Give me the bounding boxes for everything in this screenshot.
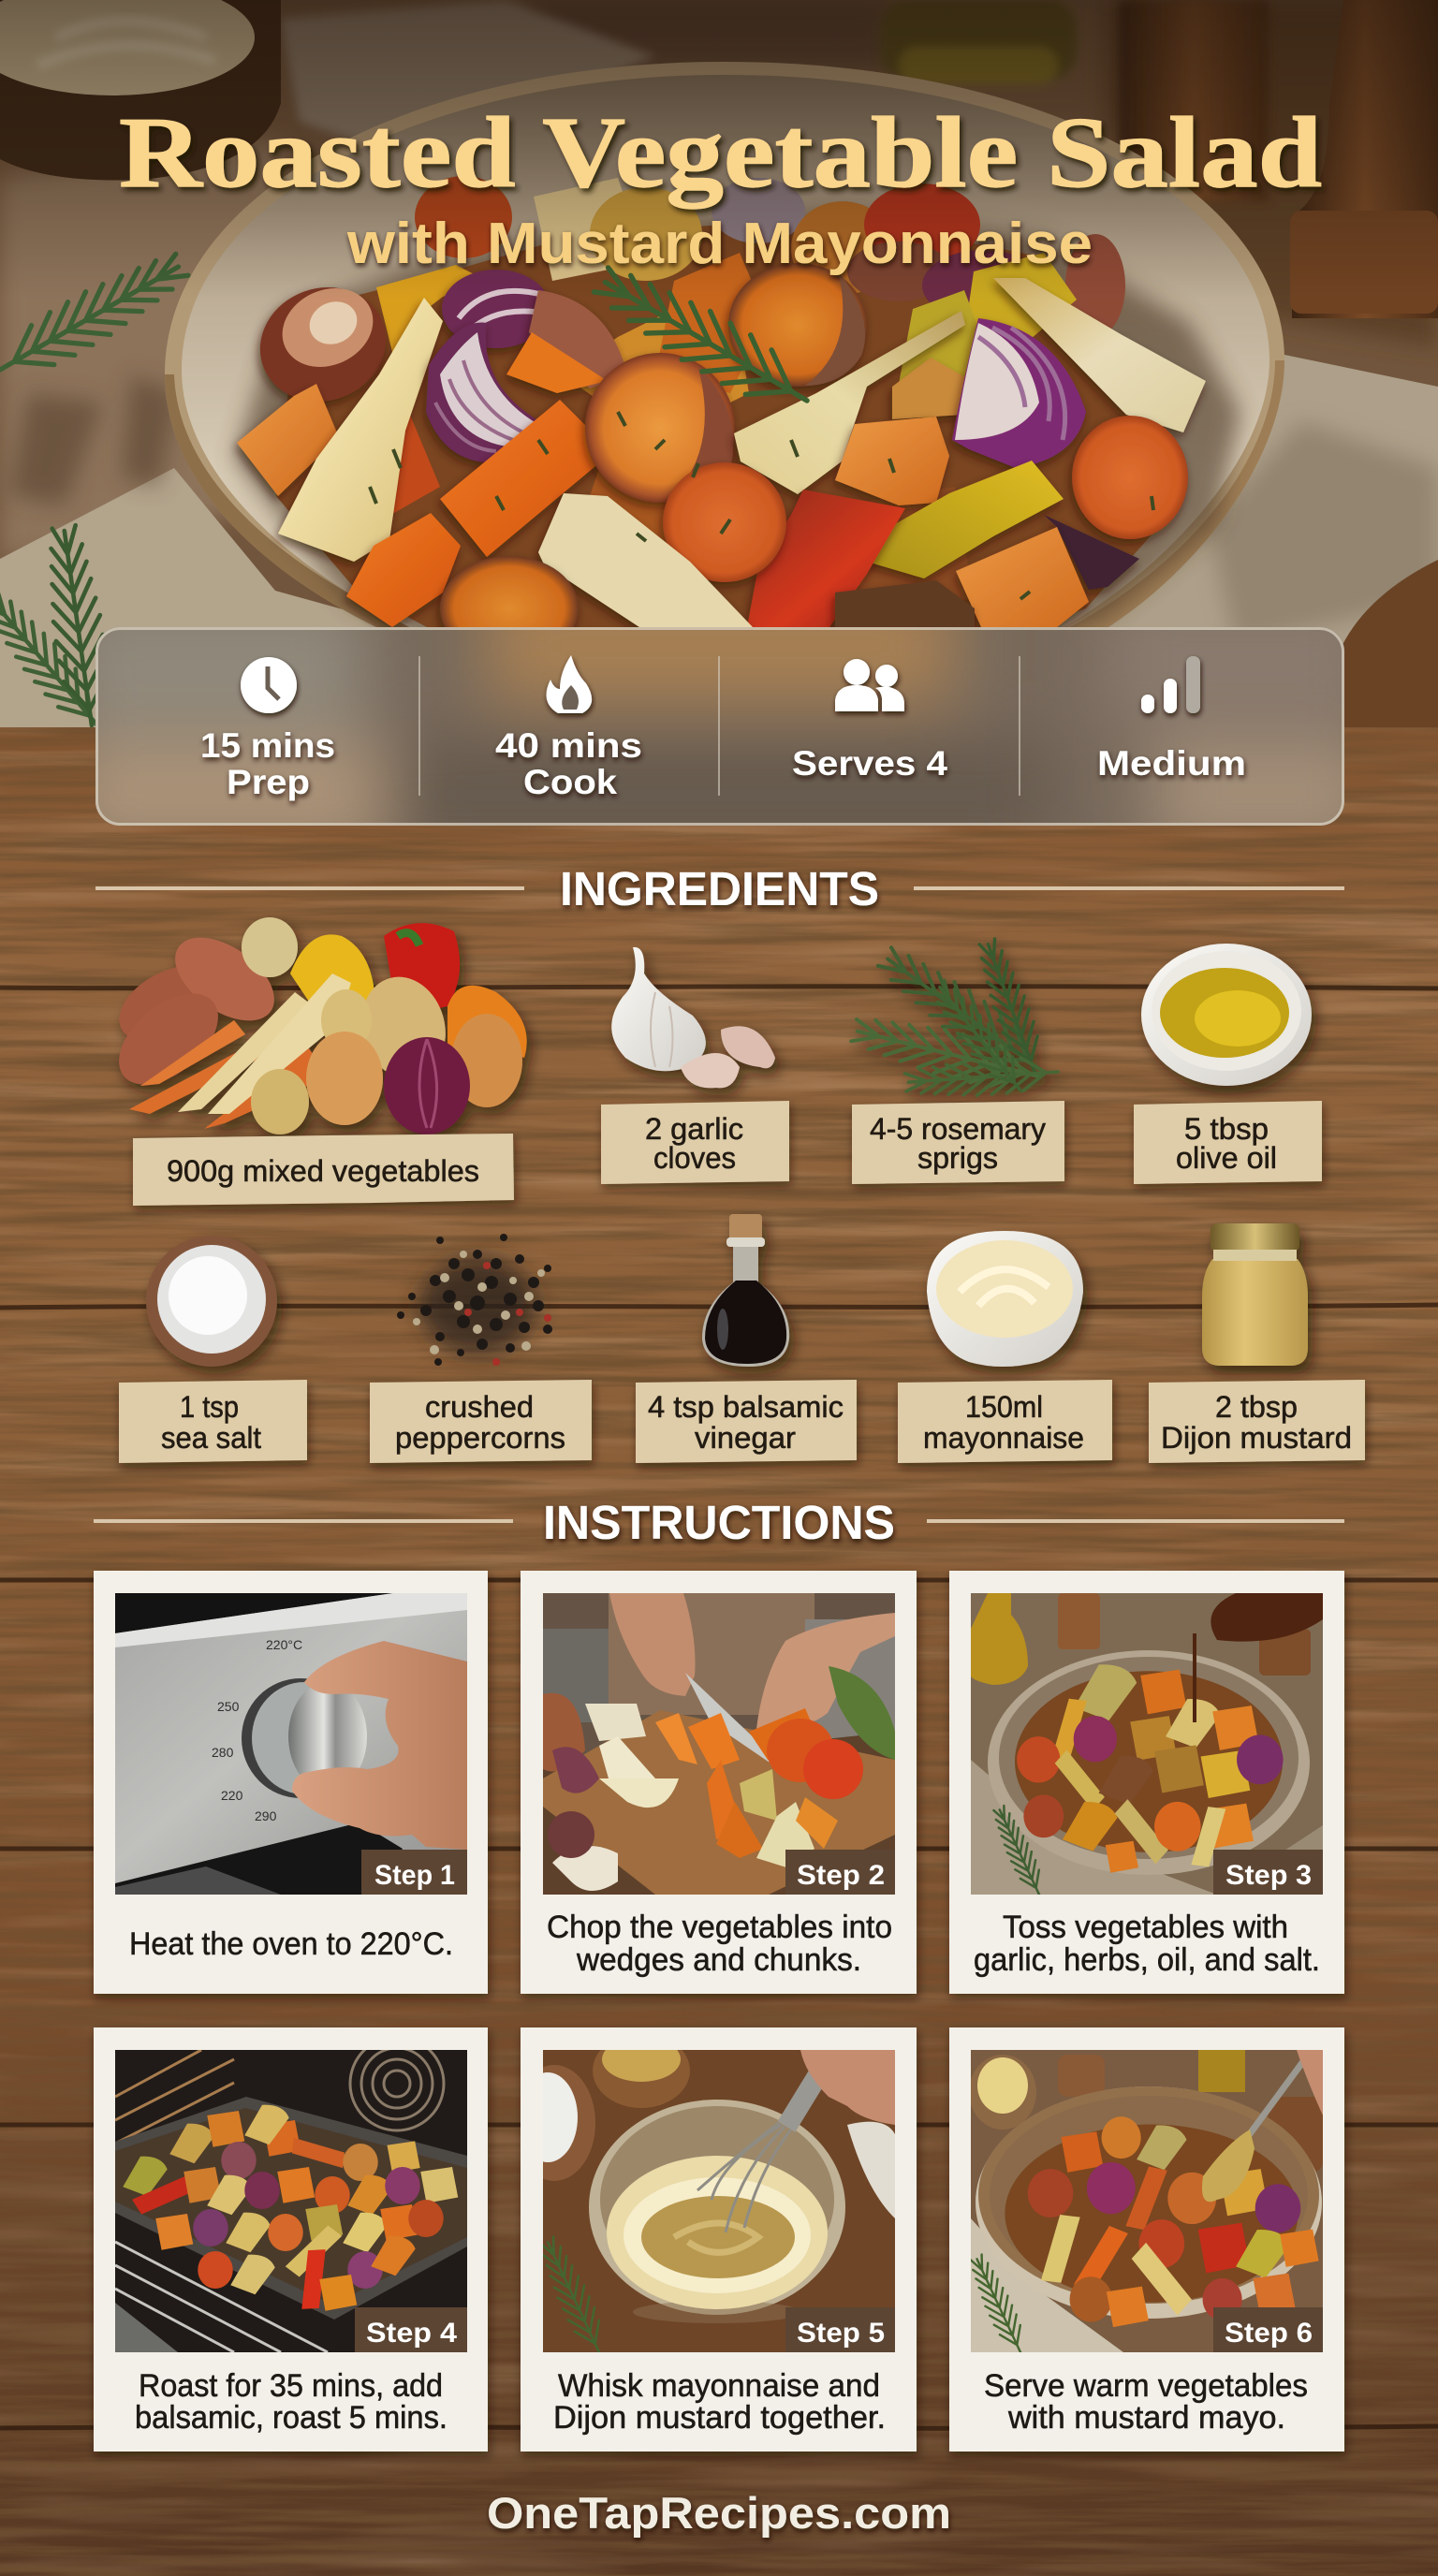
wood background — [0, 727, 1438, 2576]
vegetables — [1015, 1664, 1284, 1873]
icon: difficulty bars — [1141, 656, 1200, 713]
ingredient: olive oil: 5 tbsp — [1184, 1112, 1269, 1146]
top darkening — [0, 0, 1438, 300]
right parsnip — [993, 278, 1206, 432]
icon: balsamic bottle — [702, 1214, 789, 1367]
ingredient: olive oil: olive oil — [1176, 1141, 1277, 1175]
heading: ingredients: INGREDIENTS — [560, 862, 879, 915]
photo: serving with mustard mayo — [965, 2050, 1323, 2358]
caption — [135, 2368, 448, 2436]
icon: flame — [547, 655, 592, 713]
step badge — [355, 2307, 467, 2352]
carrot lower-left — [346, 513, 461, 627]
dark base under vegetables — [276, 217, 1166, 629]
caption: balsamic, roast 5 mins. — [135, 2400, 448, 2436]
icon: people — [835, 659, 904, 711]
background ramekin of mayonnaise — [0, 0, 281, 181]
right red onion — [952, 318, 1086, 468]
ingredient: peppercorns: crushed — [425, 1390, 534, 1424]
knife — [685, 1673, 777, 1764]
towel — [847, 2122, 895, 2218]
serving bowl — [165, 62, 1284, 655]
step badge — [1213, 2307, 1323, 2352]
shadow under vegetables — [234, 211, 1240, 646]
photo: chopping vegetables — [543, 1593, 895, 1895]
prep time: Prep — [227, 763, 310, 801]
bowl — [976, 2086, 1322, 2319]
olive oil bottle — [971, 1593, 1028, 1685]
label — [1149, 1380, 1365, 1463]
cook time — [495, 726, 642, 801]
ingredient: peppercorns — [370, 1234, 592, 1463]
icon: salt bowl — [146, 1236, 277, 1367]
ingredient: balsamic vinegar: 4 tsp balsamic — [648, 1390, 844, 1424]
back vegetables — [360, 176, 1125, 608]
subtitle: with Mustard Mayonnaise — [346, 212, 1093, 276]
ingredient: sea salt: 1 tsp — [180, 1390, 239, 1424]
carrot stick — [440, 400, 612, 557]
caption: with mustard mayo. — [1007, 2400, 1285, 2436]
lower parsnip wedge — [538, 493, 753, 627]
background olive oil bottle — [880, 0, 1077, 84]
label — [1134, 1101, 1322, 1184]
step 3 card — [949, 1571, 1344, 1994]
photo: tossing vegetables in bowl — [971, 1593, 1323, 1899]
orange cube left — [237, 384, 339, 496]
ingredient: garlic: 2 garlic — [645, 1112, 743, 1146]
caption: Heat the oven to 220°C. — [129, 1926, 453, 1962]
round sweet potato lower — [663, 462, 786, 582]
ingredient: garlic — [601, 947, 789, 1184]
main title: Roasted Vegetable Salad — [119, 97, 1322, 209]
step 4 card — [94, 2027, 488, 2452]
hand — [292, 1641, 467, 1850]
photo: whisking mayonnaise — [513, 2033, 895, 2359]
caption: Whisk mayonnaise and — [558, 2368, 880, 2404]
wooden spoon — [1328, 560, 1438, 730]
herb flecks — [370, 412, 1153, 599]
eggplant — [1044, 515, 1139, 590]
icon: clock — [241, 657, 297, 713]
caption: Toss vegetables with — [1003, 1910, 1288, 1945]
ingredient: garlic: cloves — [653, 1141, 736, 1175]
icon: mayonnaise bowl — [927, 1231, 1083, 1367]
lower-left red onion — [426, 323, 557, 462]
oven dial — [242, 1678, 360, 1798]
caption: Dijon mustard together. — [553, 2400, 886, 2436]
dividers — [419, 656, 1020, 796]
caption: Chop the vegetables into — [547, 1910, 892, 1945]
rosemary — [965, 2252, 1032, 2358]
chopped vegetables — [543, 1666, 895, 1891]
icon: olive oil bowl — [1141, 944, 1312, 1086]
caption — [547, 1910, 892, 1978]
step 2 card — [521, 1571, 917, 1994]
vegetables in bowl — [237, 176, 1206, 661]
ingredient: dijon mustard — [1149, 1223, 1365, 1463]
mustard ramekin — [593, 2033, 690, 2108]
red-skin sweet potato wedge — [506, 290, 627, 393]
icon: mustard jar — [1202, 1223, 1308, 1366]
yellow and orange cube centre — [892, 358, 972, 419]
icon: peppercorn pile — [397, 1234, 552, 1366]
prep time: 15 mins — [200, 726, 335, 765]
large sweet potato round — [585, 353, 735, 503]
step badge: Step 2 — [797, 1860, 885, 1891]
pepper mills — [1058, 1593, 1100, 1649]
caption: Roast for 35 mins, add — [139, 2368, 443, 2404]
step badge: Step 4 — [366, 2318, 457, 2349]
caption: garlic, herbs, oil, and salt. — [974, 1942, 1320, 1978]
caption: Serve warm vegetables — [984, 2368, 1308, 2404]
bowl — [988, 1650, 1310, 1875]
caption — [984, 2368, 1308, 2436]
label — [119, 1380, 307, 1463]
dial labels: 280 — [212, 1745, 234, 1760]
dial labels: 220 — [221, 1788, 243, 1803]
dark roasted piece — [835, 580, 975, 629]
ingredient: balsamic vinegar — [636, 1214, 857, 1463]
orange cube centre — [835, 417, 949, 505]
frosted glass — [66, 590, 1376, 852]
label — [601, 1101, 789, 1184]
top sweet potato round — [728, 263, 867, 387]
background pepper mills — [1119, 0, 1438, 318]
step badge: Step 6 — [1225, 2318, 1313, 2349]
label — [370, 1380, 592, 1463]
ingredient: rosemary — [848, 936, 1064, 1184]
hand — [1297, 2050, 1323, 2115]
label — [636, 1380, 857, 1463]
heading: instructions — [94, 1496, 1344, 1549]
label — [852, 1101, 1064, 1184]
left dark sweet potato round — [244, 270, 402, 419]
red pepper — [747, 490, 905, 627]
ingredient: mayonnaise — [898, 1231, 1112, 1463]
step 1 card — [94, 1571, 488, 1994]
ingredient: peppercorns: peppercorns — [395, 1421, 565, 1455]
servings: Serves 4 — [792, 744, 947, 783]
arms — [609, 1593, 695, 1696]
pepper mills — [1058, 2050, 1323, 2172]
vegetables — [1005, 2116, 1319, 2327]
sweet potato bottom — [440, 556, 579, 661]
title — [119, 97, 1322, 276]
ingredient: mayonnaise: mayonnaise — [923, 1421, 1084, 1455]
ingredient: sea salt — [119, 1236, 307, 1463]
ingredient: mixed vegetables: 900g mixed vegetables — [167, 1154, 479, 1188]
roasted vegetables on tray — [123, 2105, 458, 2312]
rosemary sprigs lower left — [0, 522, 105, 727]
centre parsnip — [734, 311, 965, 494]
photo: roasting in oven — [115, 2037, 467, 2352]
rosemary — [989, 1803, 1049, 1899]
parsnip left — [278, 298, 443, 562]
heading: instructions: INSTRUCTIONS — [543, 1496, 895, 1549]
carrot round right — [1072, 416, 1188, 539]
glass bowl — [589, 2100, 845, 2323]
ingredient: balsamic vinegar: vinegar — [695, 1421, 796, 1455]
dial labels: 290 — [255, 1808, 277, 1823]
icon: garlic bulb and cloves — [611, 947, 775, 1088]
step badge: Step 5 — [797, 2318, 885, 2349]
step badge — [785, 1850, 895, 1895]
difficulty: Medium — [1097, 744, 1246, 783]
caption — [553, 2368, 886, 2436]
footer website: OneTapRecipes.com — [487, 2488, 951, 2538]
sweet potato cube lower right — [956, 527, 1089, 627]
rosemary — [534, 2233, 612, 2359]
prep time — [200, 726, 335, 801]
heading: ingredients — [95, 862, 1344, 915]
caption: wedges and chunks. — [576, 1942, 861, 1978]
cook time: Cook — [523, 763, 617, 801]
rosemary sprig left — [0, 251, 191, 373]
step 5 card — [513, 2027, 917, 2452]
mayo ramekin — [969, 2055, 1036, 2130]
rosemary garnish — [587, 256, 821, 425]
step badge: Step 1 — [374, 1860, 455, 1891]
ingredient: mixed vegetables — [102, 917, 527, 1206]
ingredient: mayonnaise: 150ml — [965, 1390, 1043, 1424]
yellow pepper — [867, 461, 1064, 578]
label — [898, 1380, 1112, 1463]
upper red onion — [442, 270, 550, 348]
cook time: 40 mins — [495, 726, 642, 765]
dial labels — [212, 1637, 302, 1823]
ingredient: olive oil — [1134, 944, 1322, 1184]
cutting board — [543, 1710, 895, 1895]
ingredient: dijon mustard: Dijon mustard — [1161, 1421, 1352, 1455]
stats panel — [66, 590, 1376, 852]
table and linen backdrop — [0, 0, 1438, 739]
step badge — [1213, 1850, 1323, 1895]
step 6 card — [949, 2027, 1344, 2452]
ingredient: dijon mustard: 2 tbsp — [1215, 1390, 1298, 1424]
icon: rosemary sprigs — [848, 936, 1059, 1101]
photo: oven dial — [115, 1593, 467, 1895]
hero photo: roasted vegetable bowl on table — [0, 0, 1438, 739]
pouring balsamic — [1193, 1593, 1323, 1722]
vegetable pile — [102, 917, 527, 1134]
spoon with sauce — [1202, 2050, 1312, 2202]
whisk — [697, 2069, 822, 2232]
ingredient: rosemary: sprigs — [917, 1141, 998, 1175]
oven rack — [115, 2242, 328, 2352]
step badge: Step 3 — [1225, 1860, 1312, 1891]
salt bowl — [513, 2065, 595, 2181]
ingredient: sea salt: sea salt — [161, 1421, 261, 1455]
ingredient: rosemary: 4-5 rosemary — [870, 1112, 1046, 1146]
step badge — [361, 1850, 467, 1895]
step badge — [785, 2307, 895, 2352]
dial labels: 220°C — [266, 1637, 302, 1652]
caption — [974, 1910, 1320, 1978]
label — [133, 1134, 514, 1206]
baking tray — [115, 2097, 467, 2320]
hand — [800, 2050, 895, 2125]
oven fan — [350, 2037, 444, 2130]
dial labels: 250 — [217, 1699, 240, 1714]
